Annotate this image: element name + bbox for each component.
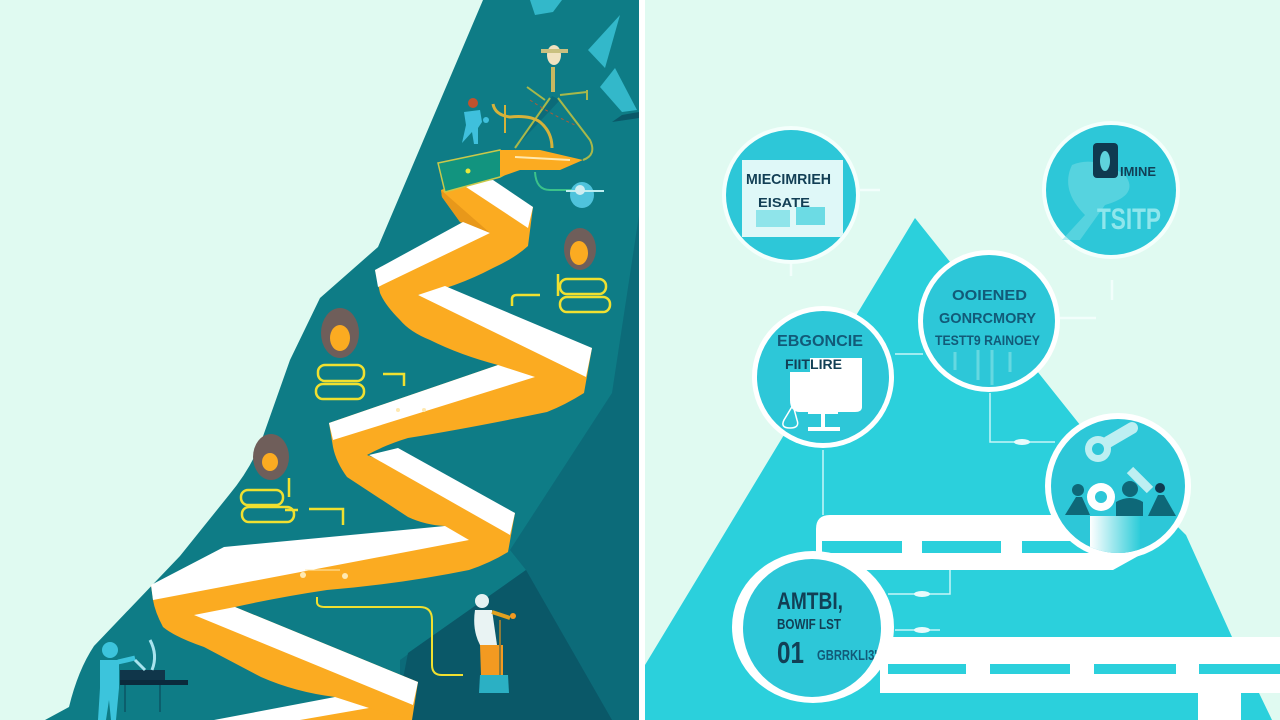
tripod with bulb (493, 45, 592, 160)
pale streaks (955, 350, 1010, 385)
icon: globe with connector (535, 172, 604, 208)
icon: upper right orange head with label (512, 228, 610, 312)
screen panel (742, 160, 843, 237)
connector to person (317, 597, 463, 675)
label text: GONRCMORY (939, 310, 1036, 327)
magnifier (1085, 428, 1150, 490)
crystals (530, 0, 639, 122)
icon: middle orange head with label (316, 308, 404, 399)
ribbon: orange body (151, 183, 592, 720)
person: white figure with orange trousers (474, 594, 516, 693)
pale silhouette (1062, 162, 1130, 240)
label text: GBRRKLI3' (817, 647, 877, 664)
circle: top left (722, 126, 860, 264)
circle: right with gear and people (1045, 413, 1191, 559)
upper road (816, 515, 1140, 570)
vertical divider (639, 0, 645, 720)
panel: mountain spiral (45, 0, 639, 720)
ribbon detail marks (300, 408, 426, 579)
label text: BOWIF LST (777, 616, 841, 633)
fading lower portion (1090, 516, 1140, 556)
circle: left (752, 306, 894, 448)
person: blue figure at top (462, 98, 489, 144)
label text: MIECIMRIEH (746, 171, 831, 188)
sub label text: EISATE (758, 195, 810, 210)
circle: center (918, 250, 1060, 392)
circle: bottom left (732, 551, 894, 703)
ribbon: white edges (151, 180, 592, 720)
platform at top of ribbon (438, 150, 583, 192)
icon: lower orange head with label (241, 434, 343, 525)
dark badge (1093, 143, 1118, 178)
pyramid triangle (645, 218, 1272, 720)
connectors (791, 190, 1112, 633)
badge text: IMINE (1120, 164, 1156, 179)
pale text: TSITP (1097, 203, 1161, 236)
monitor icon (783, 358, 862, 429)
person: cyan worker at table (98, 640, 188, 720)
number: 01 (777, 635, 804, 670)
label text: AMTBI, (777, 588, 843, 615)
sub label text: FIITLIRE (785, 356, 842, 372)
people (1065, 481, 1176, 516)
label text: OOIENED (952, 287, 1027, 304)
label text: TESTT9 RAINOEY (935, 332, 1041, 348)
label text: EBGONCIE (777, 333, 863, 350)
gear (1087, 483, 1115, 511)
panel: pyramid (645, 121, 1280, 720)
circle: top right (1042, 121, 1180, 259)
lower road (880, 637, 1280, 720)
mountain (45, 0, 639, 720)
